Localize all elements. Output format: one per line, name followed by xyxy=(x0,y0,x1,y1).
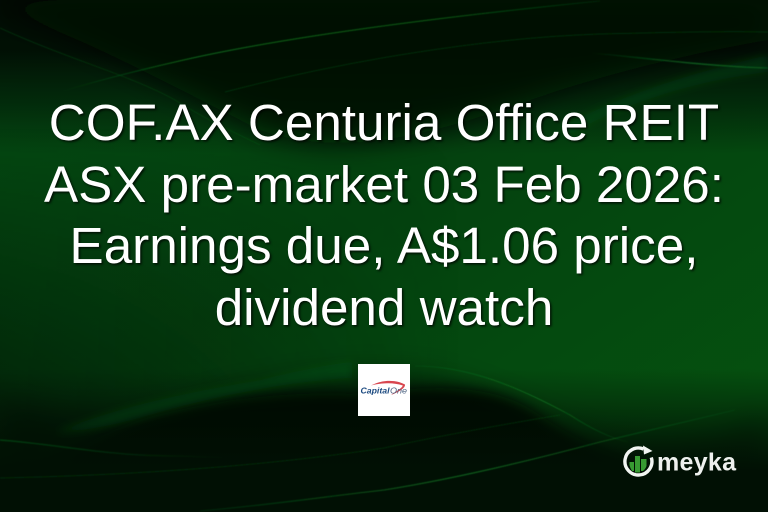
lighter bands xyxy=(55,55,768,432)
title: ASX pre-market 03 Feb 2026: xyxy=(44,156,724,213)
icon: meyka ring with bars xyxy=(625,446,652,475)
brand: meyka xyxy=(623,446,737,477)
company logo: Capital One: Capital xyxy=(360,386,390,396)
wordmark: meyka xyxy=(657,448,737,476)
title xyxy=(44,94,724,336)
title: COF.AX Centuria Office REIT xyxy=(49,94,719,151)
title: dividend watch xyxy=(215,279,553,336)
company logo: Capital One xyxy=(358,364,410,416)
title: Earnings due, A$1.06 price, xyxy=(70,217,698,274)
dark bottom region xyxy=(0,388,768,512)
company logo: Capital One: One xyxy=(390,386,408,396)
